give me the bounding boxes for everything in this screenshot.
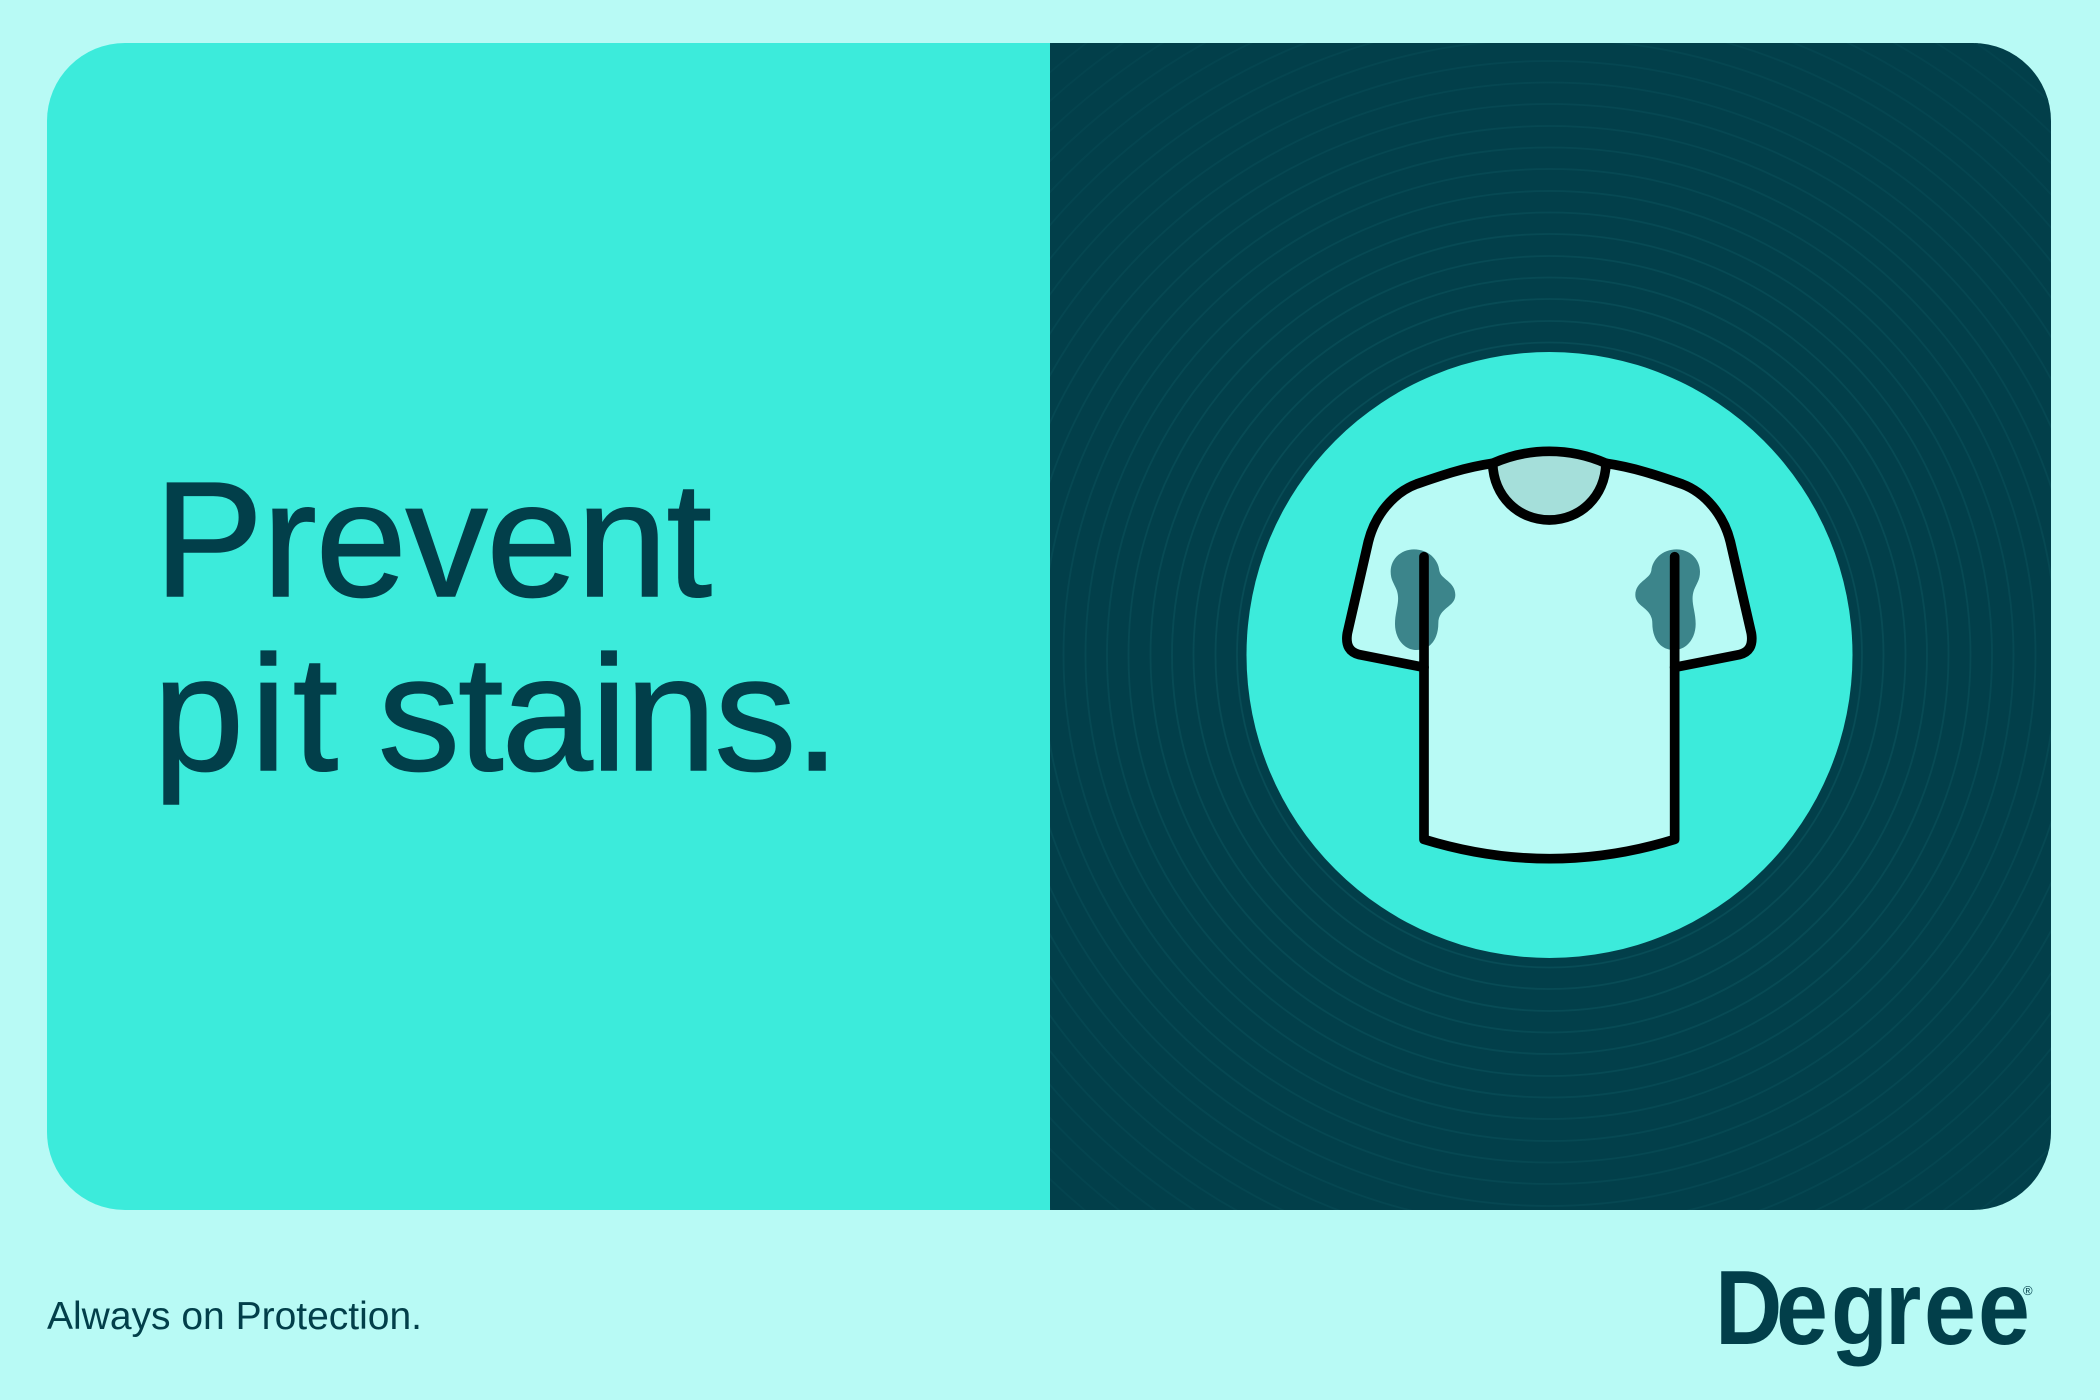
logo: Degree wordmark: ® [2023, 1283, 2033, 1298]
right underarm stain [1635, 549, 1700, 650]
tagline: Always on Protection. [47, 1295, 422, 1338]
heading: Prevent pit stains. [153, 448, 838, 805]
left underarm stain [1391, 549, 1455, 650]
shirt outline [1347, 451, 1752, 859]
heading: Prevent pit stains.: stains. [378, 622, 838, 805]
icon: t-shirt with underarm stains [1347, 451, 1752, 859]
panel: right dark panel with concentric rings [1050, 43, 2051, 1210]
panel: left teal headline panel [47, 43, 1051, 1210]
heading: Prevent pit stains.: pit [153, 622, 344, 805]
logo: Degree wordmark: Degree [1715, 1250, 2030, 1367]
shirt body and sleeves [1347, 451, 1752, 859]
teal circle behind shirt [1246, 352, 1852, 958]
collar interior [1493, 451, 1606, 520]
heading: Prevent pit stains.: Prevent [154, 448, 711, 631]
